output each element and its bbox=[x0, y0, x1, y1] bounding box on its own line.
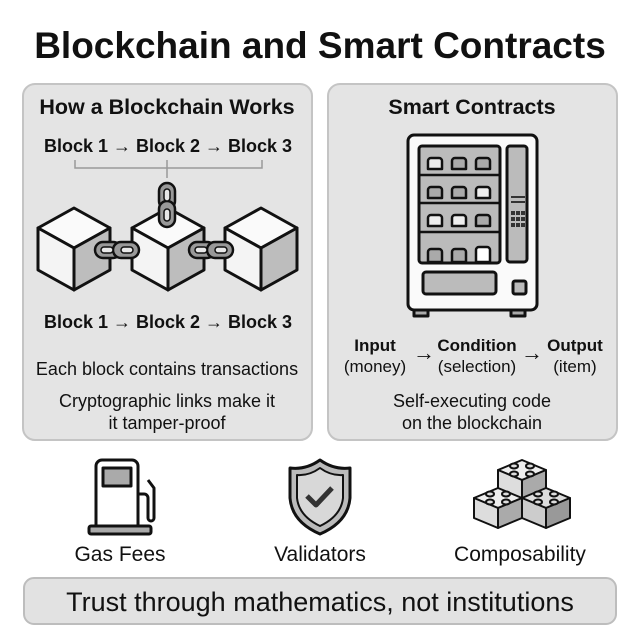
label: composability: Composability bbox=[454, 543, 586, 566]
description 2: Cryptographic links make it bbox=[59, 391, 275, 411]
title: Blockchain and Smart Contracts bbox=[34, 25, 606, 66]
banner: Trust through mathematics, not institutions bbox=[66, 587, 574, 617]
heading: how a blockchain works: How a Blockchain Works bbox=[39, 95, 295, 119]
label: validators: Validators bbox=[274, 543, 366, 566]
icon: building blocks bbox=[474, 460, 570, 528]
icon: shield bbox=[290, 460, 350, 534]
label: gas fees: Gas Fees bbox=[74, 543, 166, 566]
flow: input condition output bbox=[344, 336, 603, 376]
panel: how a blockchain works bbox=[23, 84, 312, 440]
icon: vending machine bbox=[408, 135, 537, 316]
description: on the blockchain bbox=[402, 413, 542, 433]
sequence label top: Block 1 → Block 2 → Block 3 bbox=[44, 136, 292, 156]
flow: input condition output: Input bbox=[354, 336, 396, 355]
flow: input condition output: (item) bbox=[553, 357, 597, 376]
description: Each block contains transactions bbox=[36, 359, 298, 379]
chain links bbox=[95, 183, 233, 258]
bracket bbox=[75, 160, 262, 178]
flow: input condition output: → bbox=[413, 340, 435, 365]
description 2: it tamper-proof bbox=[108, 413, 227, 433]
sequence label bottom: Block 1 → Block 2 → Block 3 bbox=[44, 312, 292, 332]
icon: gas pump bbox=[89, 460, 154, 534]
banner bbox=[24, 578, 616, 624]
description: Self-executing code bbox=[393, 391, 551, 411]
cubes with chains bbox=[38, 183, 297, 290]
panel: smart contracts bbox=[328, 84, 617, 440]
flow: input condition output: (money) bbox=[344, 357, 406, 376]
flow: input condition output: (selection) bbox=[438, 357, 516, 376]
flow: input condition output: Output bbox=[547, 336, 603, 355]
heading: smart contracts: Smart Contracts bbox=[388, 95, 556, 119]
flow: input condition output: Condition bbox=[437, 336, 517, 355]
flow: input condition output: → bbox=[521, 340, 543, 365]
